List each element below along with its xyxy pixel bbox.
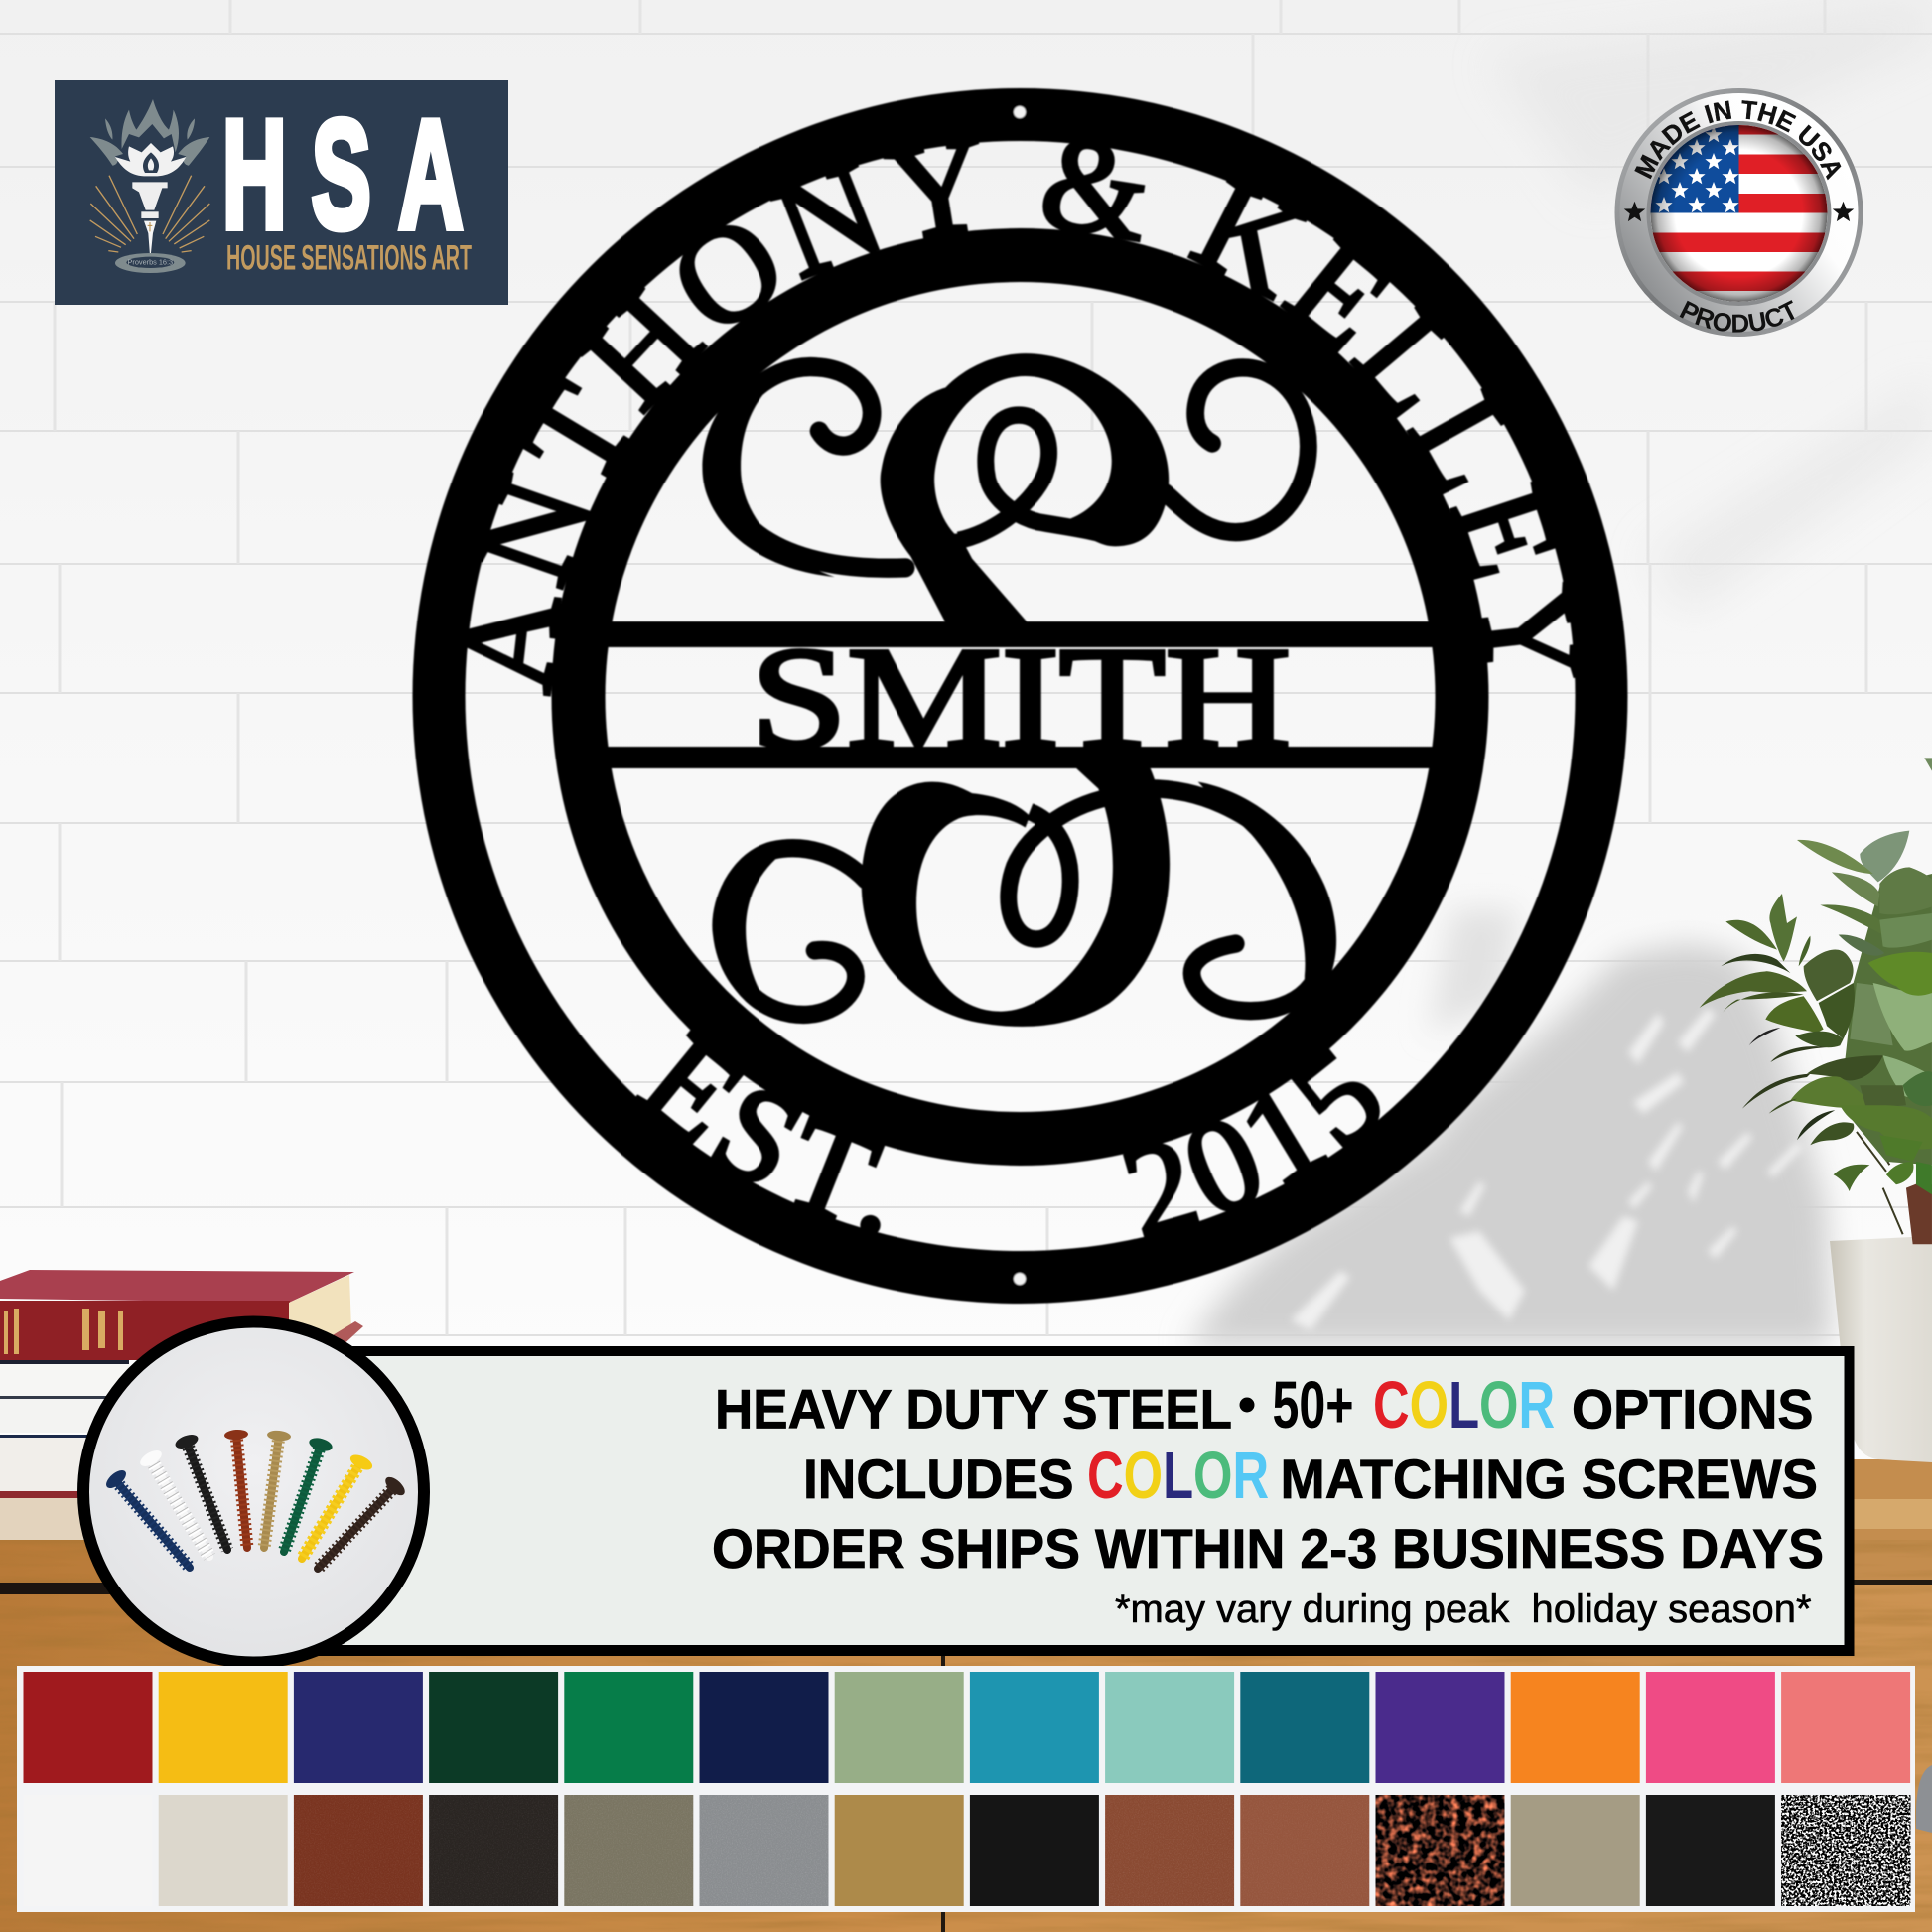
wooden table [0, 1459, 1932, 1932]
text: year: 2015 [1122, 1048, 1381, 1238]
text: HSA wordmark: HSA [222, 87, 463, 260]
badge: made in the USA [1614, 88, 1863, 337]
icon: white screw [138, 1448, 209, 1557]
callout: color matching screws circle [83, 1322, 424, 1662]
icon: green screw [284, 1436, 334, 1552]
text: surname: SMITH [751, 618, 1291, 778]
text: line 1 steel and colors: 50+ [1273, 1368, 1354, 1443]
text: line 2 matching screws: MATCHING SCREWS [1281, 1448, 1818, 1510]
icon: yellow screw [302, 1451, 374, 1559]
icon: torch with lotus flame [90, 99, 209, 273]
swatch row 1 [24, 1672, 1910, 1783]
icon: black screw [174, 1432, 227, 1550]
monogram letter S [702, 353, 1336, 1027]
text: line 2 matching screws: INCLUDES [803, 1448, 1074, 1510]
text: couple names on arc: ANTHONY & KELLEY [467, 141, 1577, 698]
text: line 3 shipping: ORDER SHIPS WITHIN 2-3 BUSINESS DAYS [712, 1517, 1824, 1580]
panel: product features [318, 1346, 1855, 1656]
name bars [608, 621, 1434, 768]
text: established year on arc: EST. [635, 1029, 886, 1233]
icon: gold screw [264, 1430, 291, 1548]
potted plant [1700, 758, 1932, 1462]
text: line 1 steel and colors: COLOR [1373, 1367, 1555, 1443]
light streaks on upper wall [1489, 0, 1932, 616]
metal monogram sign [411, 87, 1629, 1305]
icon: brown screw [318, 1474, 408, 1569]
stack of books [0, 1270, 363, 1540]
panel: color swatches [17, 1666, 1915, 1912]
text: product: PRODUCT [1680, 300, 1795, 333]
swatch row 2 [24, 1795, 1910, 1906]
plant shadow on wall [1186, 908, 1832, 1346]
text: made in the usa: MADE IN THE USA [1634, 100, 1841, 181]
icon: flag disc [1648, 123, 1831, 306]
icon: left star [1624, 202, 1645, 221]
icon: rust screw [224, 1429, 248, 1548]
mounting holes [1014, 106, 1026, 1285]
text: line 1 steel and colors [715, 1367, 1813, 1443]
text: line 2 matching screws: COLOR [1087, 1438, 1269, 1513]
text: line 1 steel and colors: HEAVY DUTY STEEL [715, 1378, 1232, 1440]
outer and inner rings [413, 88, 1628, 1304]
silver knob at right edge [1916, 1765, 1932, 1833]
text: line 2 matching screws [803, 1438, 1818, 1513]
icon: right star [1833, 202, 1854, 221]
text: holiday note: *may vary during peak holiday season* [1115, 1587, 1811, 1631]
icon: navy screw [103, 1467, 190, 1568]
text: company name: HOUSE SENSATIONS ART [226, 238, 472, 278]
logo: House Sensations Art [55, 80, 508, 305]
text: scripture reference: Proverbs 16:3 [128, 258, 173, 267]
text: line 1 steel and colors: OPTIONS [1572, 1378, 1813, 1440]
